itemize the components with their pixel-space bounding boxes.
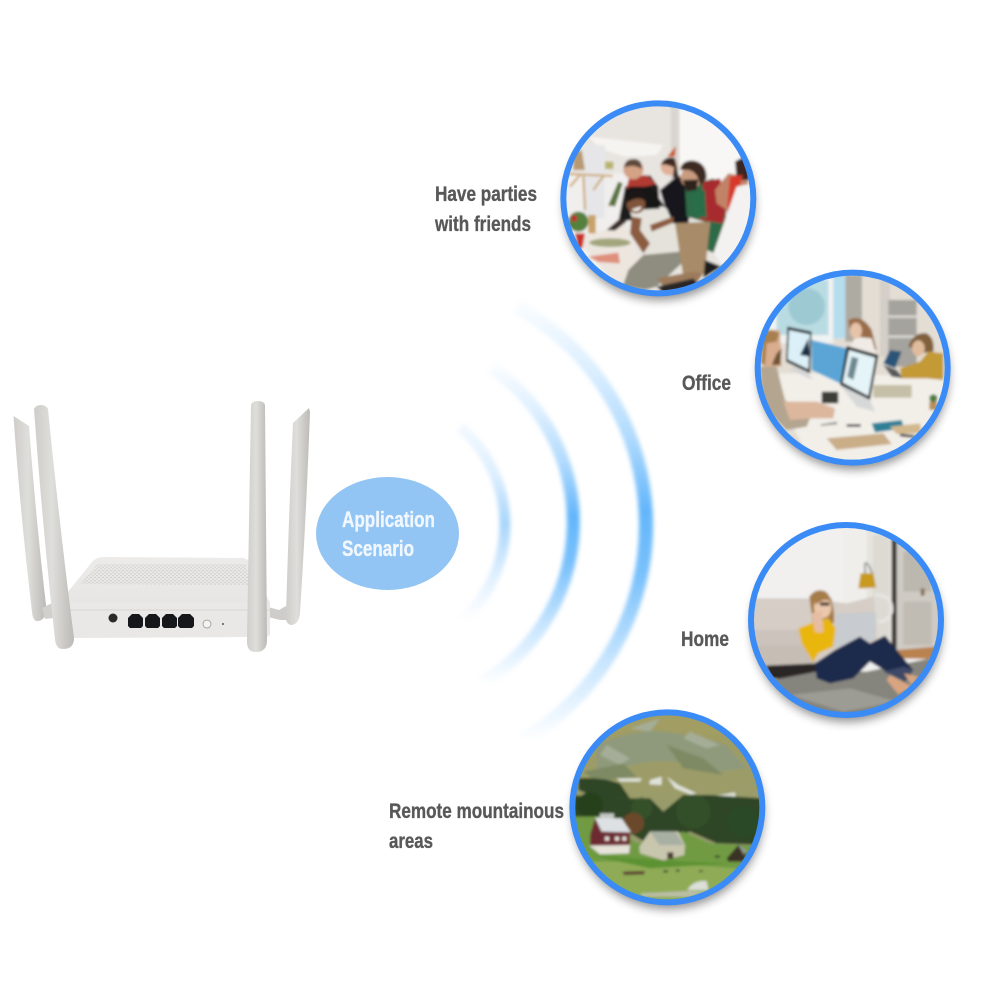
blue ring (572, 712, 762, 902)
label: remote mountainous areas (389, 800, 564, 853)
antenna: far right (286, 408, 310, 625)
vent grille (80, 564, 250, 585)
label: have parties with friends (434, 183, 537, 236)
badge text: Scenario (342, 536, 414, 561)
badge text (342, 507, 435, 561)
label: have parties with friends: Have parties (435, 183, 537, 206)
shadow (564, 110, 754, 300)
front edge line (68, 609, 270, 611)
badge text: Application (342, 507, 435, 532)
antenna connector: left (42, 603, 53, 619)
shadow (752, 532, 942, 722)
party scene (566, 107, 750, 290)
badge ellipse (316, 477, 459, 590)
router top panel (67, 557, 270, 610)
photo circle: party (560, 100, 757, 300)
shadow (573, 719, 763, 909)
antenna connector: right (268, 606, 290, 620)
photo circle: mountain (570, 710, 767, 909)
blue ring (563, 103, 753, 293)
status dot (222, 623, 224, 625)
power jack (108, 614, 118, 622)
label: remote mountainous areas: Remote mountainous (389, 800, 564, 823)
label: remote mountainous areas: areas (389, 830, 433, 853)
label: have parties with friends: with friends (434, 213, 531, 236)
antenna: inner left (34, 405, 74, 649)
blue ring (758, 273, 948, 463)
antenna: inner right (247, 401, 267, 652)
signal waves (460, 307, 646, 740)
home scene (754, 528, 938, 712)
label: home: Home (681, 628, 729, 651)
mountain scene (575, 715, 760, 900)
ethernet ports (128, 614, 194, 628)
router front face (68, 603, 270, 638)
office scene (760, 276, 945, 460)
badge: application scenario (316, 477, 459, 590)
blue ring (751, 525, 941, 715)
inner wave (460, 427, 505, 620)
photo circle: home (747, 522, 947, 722)
photo circle: office (753, 270, 953, 470)
router (14, 401, 310, 652)
shadow (759, 279, 949, 469)
reset button (203, 620, 211, 628)
label: office: Office (682, 372, 731, 395)
outer wave (517, 307, 646, 740)
antenna: far left (14, 416, 46, 621)
middle wave (482, 368, 573, 683)
